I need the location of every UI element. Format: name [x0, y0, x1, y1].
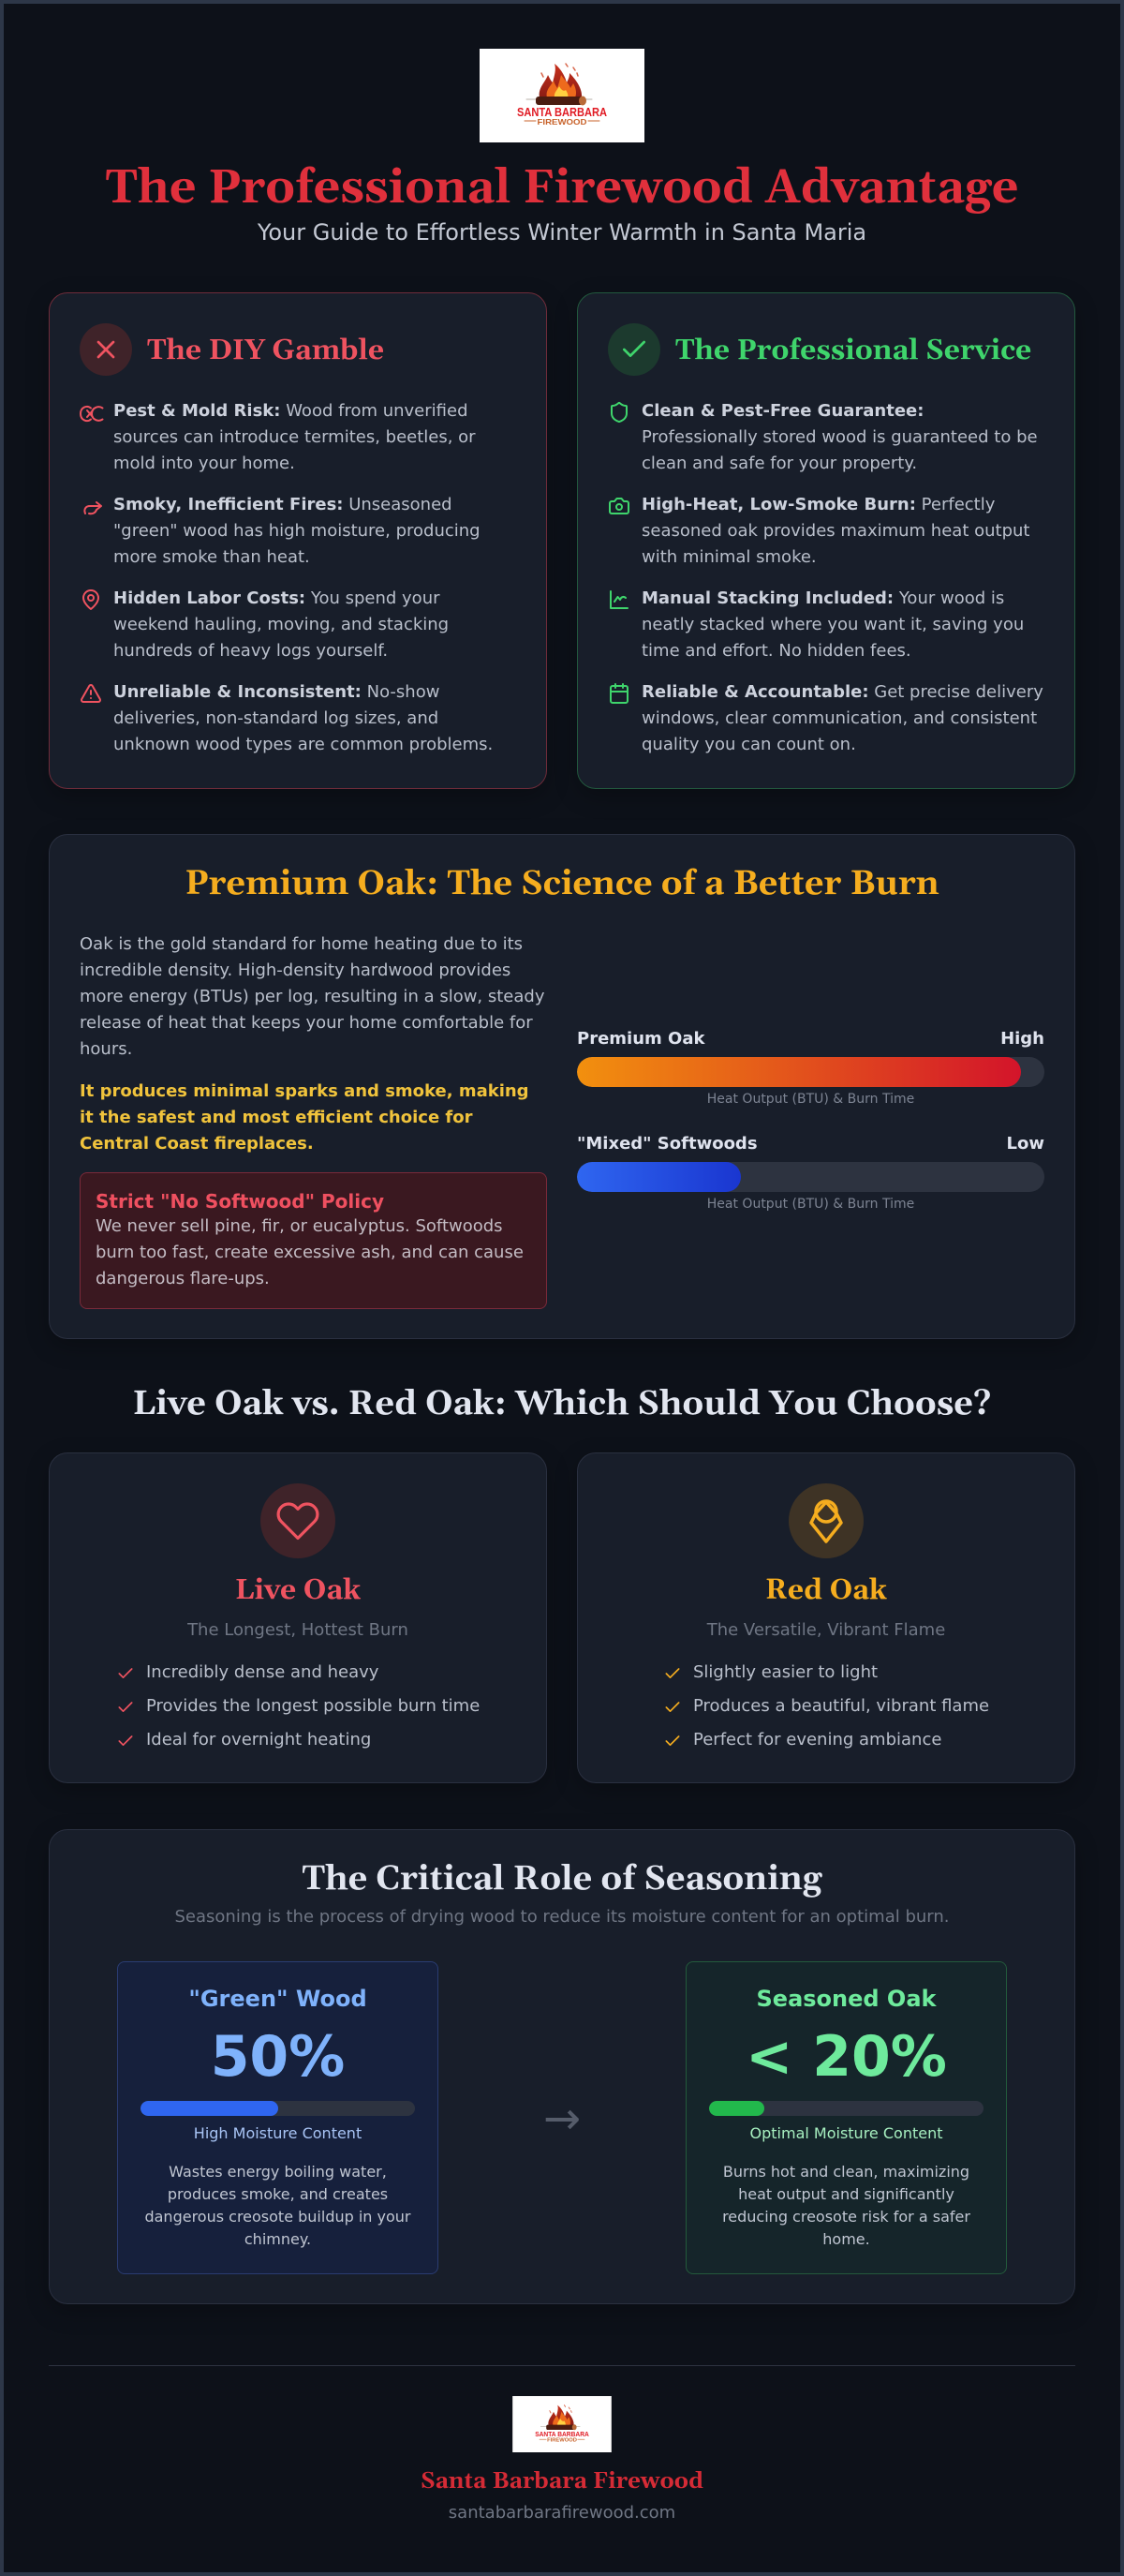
card body: [144, 2163, 411, 2248]
bar chart: premium oak: [577, 1029, 1044, 1107]
text: oak description: hours.: [80, 1039, 132, 1059]
bar value: Low: [1007, 1134, 1044, 1154]
item: unreliable and inconsistent: unknown wood types are common problems.: [113, 735, 493, 753]
check item: Provides the longest possible burn time: [146, 1696, 480, 1716]
check item: Slightly easier to light: [693, 1662, 878, 1682]
bar label: Premium Oak: [577, 1029, 704, 1049]
title: The Professional Firewood Advantage: [106, 160, 1018, 219]
subheading: The Longest, Hottest Burn: [187, 1619, 408, 1640]
footer logo: FIREWOOD: [547, 2438, 577, 2444]
logo: [480, 49, 644, 142]
item: reliable and accountable: Reliable & Accountable: Get precise delivery: [642, 682, 1043, 701]
item: smoky fires: [83, 495, 481, 566]
card body: Burns hot and clean, maximizing: [723, 2163, 969, 2181]
footer logo: [512, 2396, 612, 2452]
item: unreliable and inconsistent: Unreliable & Inconsistent: No-show: [113, 682, 439, 701]
item: clean and pest-free: Professionally stored wood is guaranteed to be: [642, 427, 1038, 446]
bar track: [577, 1057, 1044, 1087]
moisture fill: [709, 2101, 764, 2116]
item: manual stacking: Manual Stacking Included: Your wood is: [642, 588, 1004, 607]
item: pest and mold risk: mold into your home.: [113, 454, 295, 472]
logo: SANTA BARBARA: [517, 106, 607, 119]
card body: home.: [822, 2230, 870, 2248]
footer brand name: Santa Barbara Firewood: [421, 2468, 703, 2496]
item: pest and mold risk: Pest & Mold Risk: Wood from unverified: [113, 401, 468, 420]
heading: seasoning: The Critical Role of Seasoning: [303, 1859, 821, 1901]
text: oak description: [80, 934, 545, 1059]
text: safety highlight: It produces minimal sparks and smoke, making: [80, 1081, 529, 1101]
item: hidden labor costs: hundreds of heavy logs yourself.: [113, 641, 388, 660]
bar label: "Mixed" Softwoods: [577, 1134, 758, 1154]
card: green wood: [117, 1961, 438, 2274]
moisture label: High Moisture Content: [194, 2124, 362, 2142]
item: high heat low smoke: [609, 495, 1029, 566]
item: reliable and accountable: quality you can count on.: [642, 735, 856, 753]
bar fill: [577, 1162, 741, 1192]
card body: [722, 2163, 970, 2248]
item: clean and pest-free: clean and safe for your property.: [642, 454, 917, 472]
text: oak description: more energy (BTUs) per log, resulting in a slow, steady: [80, 987, 545, 1006]
icon: x in circle: [80, 323, 132, 376]
icon: check in circle: [608, 323, 660, 376]
item: unreliable and inconsistent: [81, 682, 493, 753]
item: smoky fires: more smoke than heat.: [113, 547, 310, 566]
heading: live oak: Live Oak: [235, 1573, 361, 1609]
footer logo: SANTA BARBARA: [535, 2430, 589, 2438]
bar caption: Heat Output (BTU) & Burn Time: [707, 1092, 914, 1107]
heading: red oak: Red Oak: [765, 1573, 887, 1609]
callout body: burn too fast, create excessive ash, and can cause: [96, 1243, 524, 1262]
callout body: We never sell pine, fir, or eucalyptus. Softwoods: [96, 1216, 503, 1236]
card body: dangerous creosote buildup in your: [144, 2208, 411, 2226]
text: oak description: Oak is the gold standard for home heating due to its: [80, 934, 523, 954]
panel: the DIY gamble: [49, 292, 547, 789]
item: reliable and accountable: [610, 682, 1043, 753]
heading: premium oak: Premium Oak: The Science of a Better Burn: [185, 864, 939, 906]
item: hidden labor costs: Hidden Labor Costs: You spend your: [113, 588, 440, 607]
heading: the DIY gamble: The DIY Gamble: [147, 334, 384, 369]
icon: heart in circle: [260, 1483, 335, 1558]
panel: premium oak: [49, 834, 1075, 1339]
checklist: [665, 1662, 989, 1750]
panel: the professional service: [577, 292, 1075, 789]
item: smoky fires: "green" wood has high moisture, producing: [113, 521, 481, 540]
check item: Perfect for evening ambiance: [693, 1730, 941, 1750]
icon: flame gem in circle: [789, 1483, 864, 1558]
panel: seasoning: [49, 1829, 1075, 2304]
check item: Incredibly dense and heavy: [146, 1662, 378, 1682]
item: high heat low smoke: High-Heat, Low-Smoke Burn: Perfectly: [642, 495, 995, 514]
card heading: "Green" Wood: [188, 1986, 367, 2012]
bar track: [577, 1162, 1044, 1192]
heading: live oak vs red oak: Live Oak vs. Red Oak: Which Should You Choose?: [132, 1384, 992, 1426]
text: safety highlight: it the safest and most efficient choice for: [80, 1108, 472, 1127]
text: oak description: release of heat that keeps your home comfortable for: [80, 1013, 533, 1033]
callout body: dangerous flare-ups.: [96, 1269, 270, 1288]
bar caption: Heat Output (BTU) & Burn Time: [707, 1197, 914, 1212]
footer url: santabarbarafirewood.com: [449, 2503, 675, 2523]
footer rule: [49, 2365, 1075, 2366]
callout: no softwood policy: [80, 1172, 547, 1309]
item: pest and mold risk: [80, 401, 476, 472]
panel: live oak: [49, 1452, 547, 1783]
item: manual stacking: [610, 588, 1024, 660]
item: unreliable and inconsistent: deliveries, non-standard log sizes, and: [113, 708, 438, 727]
check item: Ideal for overnight heating: [146, 1730, 371, 1750]
item: manual stacking: time and effort. No hidden fees.: [642, 641, 911, 660]
logo: FIREWOOD: [538, 117, 586, 127]
item: clean and pest-free: Clean & Pest-Free Guarantee:: [642, 401, 924, 420]
item: hidden labor costs: weekend hauling, moving, and stacking: [113, 615, 449, 633]
arrow: →: [543, 2092, 581, 2145]
callout heading: Strict "No Softwood" Policy: [96, 1190, 384, 1213]
stat: under 20 percent: < 20%: [746, 2024, 947, 2090]
item: manual stacking: neatly stacked where you want it, saving you: [642, 615, 1024, 633]
heading: the professional service: The Professional Service: [675, 334, 1031, 369]
card body: heat output and significantly: [738, 2185, 954, 2203]
text: seasoning definition: Seasoning is the process of drying wood to reduce its moisture content for an optimal burn.: [174, 1907, 950, 1927]
item: reliable and accountable: windows, clear communication, and consistent: [642, 708, 1037, 727]
text: safety highlight: Central Coast fireplaces.: [80, 1134, 314, 1154]
text: oak description: incredible density. High-density hardwood provides: [80, 960, 510, 980]
moisture bar: [709, 2101, 984, 2116]
moisture bar: [140, 2101, 415, 2116]
bar fill: [577, 1057, 1021, 1087]
bar chart: softwoods: [577, 1134, 1044, 1212]
callout body: [96, 1216, 524, 1288]
item: smoky fires: Smoky, Inefficient Fires: Unseasoned: [113, 495, 452, 514]
item: high heat low smoke: seasoned oak provides maximum heat output: [642, 521, 1029, 540]
item: hidden labor costs: [82, 588, 449, 660]
subheading: The Versatile, Vibrant Flame: [707, 1619, 945, 1640]
card: seasoned oak: [686, 1961, 1007, 2274]
card body: Wastes energy boiling water,: [169, 2163, 387, 2181]
subtitle: Your Guide to Effortless Winter Warmth in Santa Maria: [258, 219, 866, 246]
checklist: [118, 1662, 480, 1750]
moisture fill: [140, 2101, 277, 2116]
item: pest and mold risk: sources can introduce termites, beetles, or: [113, 427, 476, 446]
card body: produces smoke, and creates: [168, 2185, 388, 2203]
card body: chimney.: [244, 2230, 311, 2248]
item: high heat low smoke: with minimal smoke.: [642, 547, 817, 566]
card body: reducing creosote risk for a safer: [722, 2208, 970, 2226]
check item: Produces a beautiful, vibrant flame: [693, 1696, 989, 1716]
text: safety highlight: [80, 1081, 529, 1154]
stat: 50 percent: 50%: [211, 2024, 345, 2090]
panel: red oak: [577, 1452, 1075, 1783]
moisture label: Optimal Moisture Content: [750, 2124, 942, 2142]
item: clean and pest-free: [611, 401, 1038, 472]
bar value: High: [1000, 1029, 1044, 1049]
card heading: Seasoned Oak: [757, 1986, 937, 2012]
